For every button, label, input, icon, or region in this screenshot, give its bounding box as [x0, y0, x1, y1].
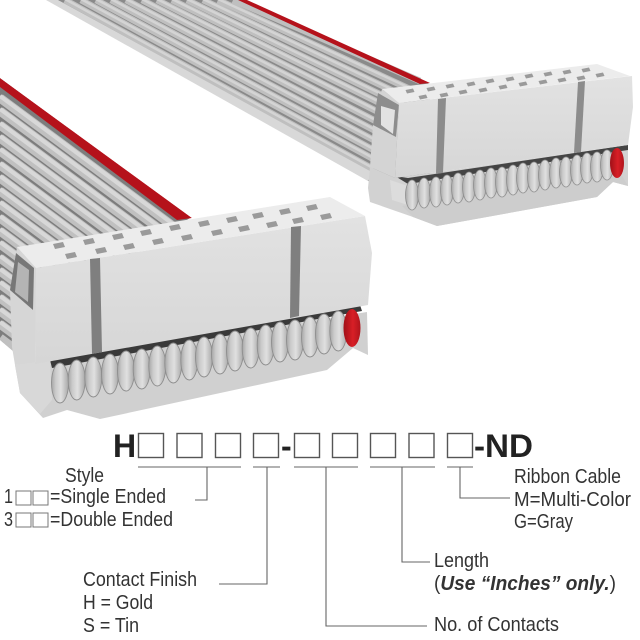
left side and latch [10, 247, 37, 365]
legend: ribbon cable: G=Gray [514, 511, 573, 533]
legend: number of contacts: No. of Contacts [434, 614, 559, 636]
contact holes [53, 204, 332, 259]
slots [436, 98, 446, 174]
connector: lower left [10, 197, 372, 419]
legend: length: (Use “Inches” only.) [434, 573, 616, 595]
red stripe: upper right cable [238, 0, 430, 84]
hyphen: - [281, 428, 292, 464]
lower housing [368, 145, 628, 226]
red coil [610, 148, 624, 178]
legend: style: 3 [4, 509, 13, 531]
legend: style [4, 465, 173, 531]
front face [395, 76, 633, 178]
connector: upper right [368, 64, 633, 226]
legend: contact finish: S = Tin [83, 615, 139, 637]
legend: contact finish: H = Gold [83, 592, 153, 614]
ribbon cable: lower left [0, 78, 192, 351]
lower housing [15, 312, 368, 419]
slots [90, 258, 102, 354]
ribbon cable: upper right [46, 0, 430, 190]
legend: style: 1 [4, 486, 13, 508]
legend: length [434, 550, 616, 595]
leader lines [138, 467, 510, 626]
front face [35, 216, 372, 364]
part number code [113, 428, 533, 464]
ND suffix: -ND [474, 428, 533, 464]
code boxes [138, 434, 472, 458]
H prefix: H [113, 428, 136, 464]
top face [17, 197, 365, 268]
legend: style: Style [65, 465, 104, 487]
legend: style: =Double Ended [50, 509, 173, 531]
legend: contact finish [83, 569, 197, 637]
coiled cable end [52, 311, 347, 403]
legend: ribbon cable [514, 466, 631, 533]
top face [382, 64, 630, 103]
coiled cable end [406, 150, 614, 210]
legend: contact finish: Contact Finish [83, 569, 197, 591]
legend: ribbon cable: M=Multi-Color [514, 489, 631, 511]
legend: length: Length [434, 550, 489, 572]
red coil [344, 309, 360, 347]
left side and latch [370, 89, 399, 178]
legend: ribbon cable: Ribbon Cable [514, 466, 621, 488]
red stripe: lower left cable [0, 78, 192, 220]
legend: style: =Single Ended [50, 486, 166, 508]
contact holes [406, 68, 604, 100]
